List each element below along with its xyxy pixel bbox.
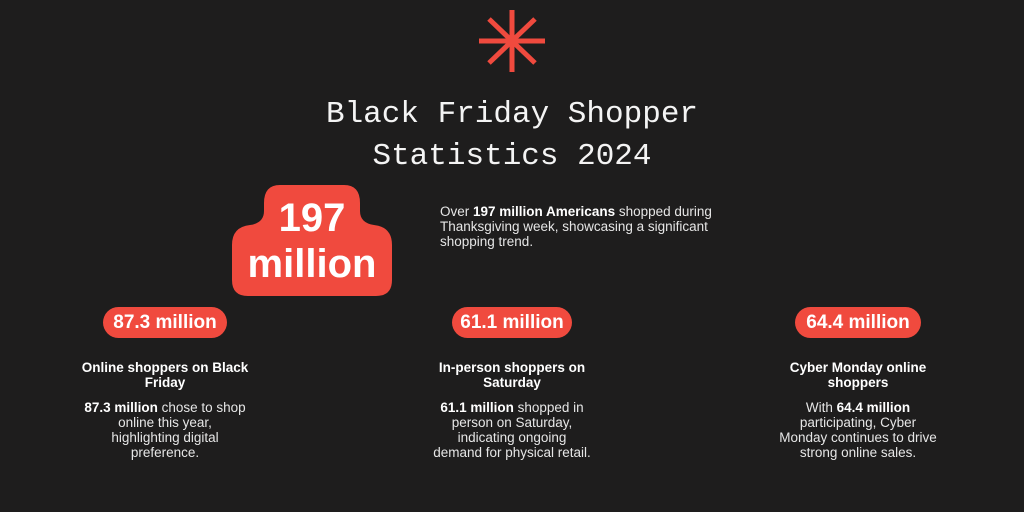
panel: in-person shoppers: 61.1 million shopped in xyxy=(440,400,584,415)
panel: online shoppers xyxy=(82,360,248,460)
title: Statistics 2024 xyxy=(372,139,652,174)
panel: online shoppers: Friday xyxy=(145,375,185,390)
panel: cyber monday: Monday continues to drive xyxy=(779,430,937,445)
panel: in-person shoppers: In-person shoppers on xyxy=(439,360,585,375)
panel: in-person shoppers: Saturday xyxy=(483,375,541,390)
pill: 87.3 million xyxy=(103,307,227,338)
panel: online shoppers: highlighting digital xyxy=(111,430,219,445)
panel: cyber monday: strong online sales. xyxy=(800,445,916,460)
callout: 197 million blob xyxy=(232,185,392,296)
pill: 64.4 million xyxy=(795,307,921,338)
icon: asterisk xyxy=(479,10,545,72)
pill: 61.1 million xyxy=(452,307,572,338)
panel: cyber monday: With 64.4 million xyxy=(806,400,910,415)
panel: online shoppers: online this year, xyxy=(118,415,212,430)
title xyxy=(326,97,698,174)
panel: in-person shoppers: indicating ongoing xyxy=(458,430,566,445)
panel: cyber monday: shoppers xyxy=(828,375,888,390)
panel: online shoppers: preference. xyxy=(131,445,199,460)
text: 197 million description: Over 197 million Americans shopped during Thanksgiving week, showcasing a significant shopping trend. xyxy=(440,204,712,249)
callout: 197 million blob: 197 xyxy=(279,196,345,240)
panel: online shoppers: 87.3 million chose to shop xyxy=(84,400,246,415)
panel: in-person shoppers: person on Saturday, xyxy=(452,415,572,430)
panel: cyber monday: Cyber Monday online xyxy=(790,360,926,375)
pill: 87.3 million: 87.3 million xyxy=(113,312,217,333)
panel: cyber monday xyxy=(779,360,937,460)
pill: 61.1 million: 61.1 million xyxy=(460,312,564,333)
title: Black Friday Shopper xyxy=(326,97,698,132)
panel: in-person shoppers xyxy=(433,360,591,460)
panel: online shoppers: Online shoppers on Black xyxy=(82,360,248,375)
panel: cyber monday: participating, Cyber xyxy=(800,415,916,430)
pill: 64.4 million: 64.4 million xyxy=(806,312,910,333)
panel: in-person shoppers: demand for physical retail. xyxy=(433,445,591,460)
callout: 197 million blob: million xyxy=(248,242,376,286)
